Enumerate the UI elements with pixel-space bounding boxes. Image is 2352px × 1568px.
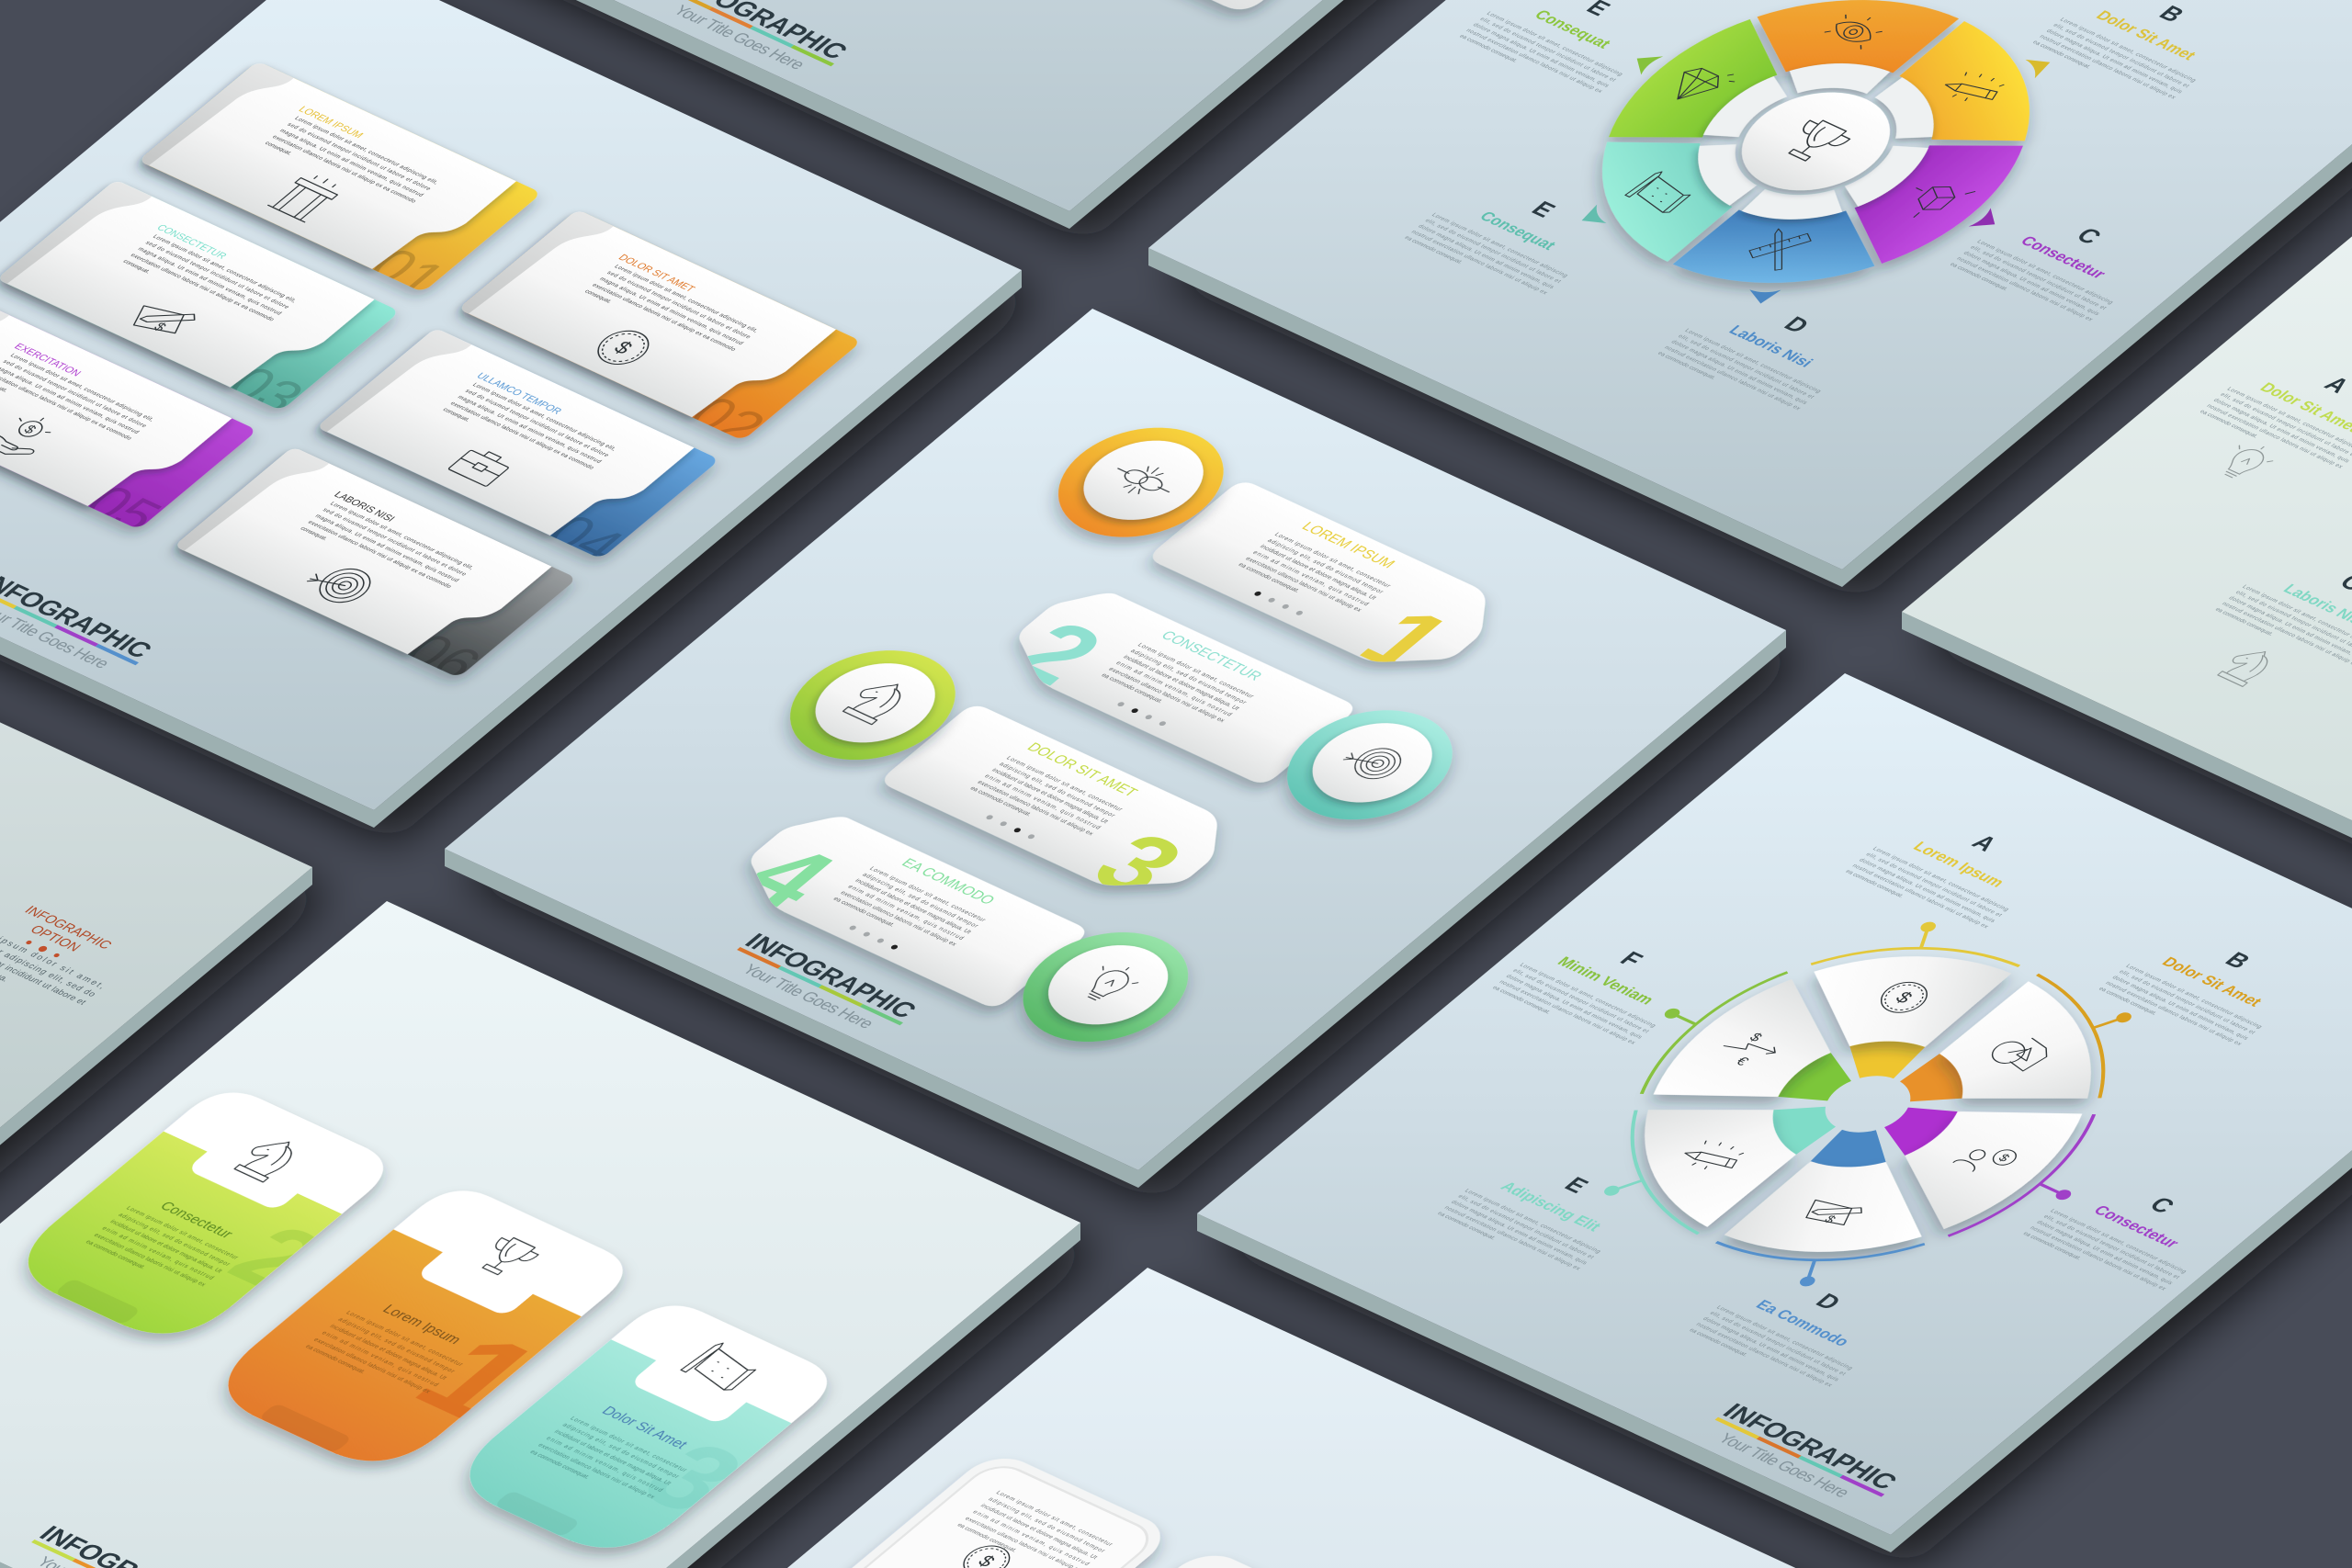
label F: dolore magna aliqua. Ut enim ad minim veniam, quis <box>1504 974 1644 1040</box>
segment icons <box>1621 948 2116 1259</box>
label E upper: Lorem ipsum dolor sit amet, consectetur adipiscing <box>1485 11 1624 77</box>
label B <box>2097 919 2316 1053</box>
step 2 card: ea commodo consequat. <box>1100 672 1164 705</box>
card 06: Lorem ipsum dolor sit amet, consectetur adipiscing elit, <box>328 501 475 571</box>
panel: top centre sheet <box>376 0 1717 229</box>
card 01: Lorem ipsum dolor sit amet, consectetur adipiscing elit, <box>293 116 440 186</box>
label A: A <box>1966 830 2003 856</box>
white segments <box>1538 890 2198 1318</box>
white card: Lorem ipsum dolor sit amet, consectetur <box>994 1490 1114 1548</box>
card 06 <box>159 446 579 691</box>
label B: B <box>2219 948 2256 973</box>
heading: OPTION <box>27 923 84 954</box>
card 01 <box>124 62 543 306</box>
step 4 card: incididunt ut labore et dolore magna aliqua. Ut <box>854 878 972 935</box>
card: Consectetur: adipiscing elit, sed do eiusmod tempor <box>117 1213 232 1268</box>
step 3 badge <box>756 630 989 780</box>
card 02: exercitation ullamco laboris nisi ut aliquip ex ea commodo <box>591 283 738 353</box>
card 06: consequat. <box>299 525 329 542</box>
card 04: consequat. <box>441 407 471 423</box>
card 03: sed do eiusmod tempor incididunt ut labore et dolore <box>143 240 290 310</box>
label C: C <box>2143 1192 2181 1218</box>
step 2 badge <box>1253 690 1487 840</box>
card 02: magna aliqua. Ut enim ad minim veniam, quis nostrud <box>598 276 745 346</box>
label A: dolore magna aliqua. Ut enim ad minim veniam, quis <box>2211 398 2351 464</box>
card 05: EXERCITATION <box>12 342 83 378</box>
label F: nostrud exercitation ullamco laboris nisi ut aliquip ex <box>1498 979 1637 1046</box>
step 2 card: adipiscing elit, sed do eiusmod tempor <box>1128 649 1249 705</box>
label E lower: E <box>1526 197 1562 221</box>
label D: nostrud exercitation ullamco laboris nisi ut aliquip ex <box>1694 1322 1834 1389</box>
label F: elit, sed do eiusmod tempor incididunt ut labore et <box>1511 968 1650 1034</box>
step 3 card: incididunt ut labore et dolore magna aliqua. Ut <box>990 768 1109 825</box>
logo: INFOGRAPHIC <box>739 929 922 1022</box>
step 2 card: CONSECTETUR <box>1158 628 1265 683</box>
label C: nostrud exercitation ullamco laboris nisi ut aliquip ex <box>2029 1225 2168 1292</box>
card 05: Lorem ipsum dolor sit amet, consectetur adipiscing elit, <box>8 353 155 423</box>
label C: Consectetur <box>2017 233 2109 282</box>
card 02: DOLOR SIT AMET <box>616 253 697 294</box>
card 03 <box>0 179 401 423</box>
white card: adipiscing elit, sed do eiusmod tempor <box>987 1496 1107 1554</box>
label B: dolore magna aliqua. Ut enim ad minim veniam, quis <box>2110 975 2250 1041</box>
card: Dolor Sit Amet: adipiscing elit, sed do eiusmod tempor <box>560 1423 681 1480</box>
segment icons <box>1552 0 2072 311</box>
label E <box>1436 1145 1655 1278</box>
heading: INFOGRAPHIC <box>21 904 115 952</box>
step 4 card: 4 <box>719 829 858 926</box>
step 1 card: 1 <box>1337 592 1476 690</box>
panel: three rounded cards <box>0 901 1080 1568</box>
card 04: Lorem ipsum dolor sit amet, consectetur adipiscing elit, <box>471 382 617 452</box>
card: Consectetur: ea commodo consequat. <box>84 1239 147 1270</box>
step 2 card: Lorem ipsum dolor sit amet, consectetur <box>1136 642 1255 700</box>
card 01: consequat. <box>263 141 294 156</box>
card: Consectetur: incididunt ut labore et dolore magna aliqua. Ut <box>108 1219 223 1274</box>
label E lower: dolore magna aliqua. Ut enim ad minim veniam, quis <box>1417 223 1555 290</box>
card: Consectetur: Lorem ipsum dolor sit amet, consectetur <box>124 1206 240 1261</box>
label B: elit, sed do eiusmod tempor incididunt ut labore et <box>2118 969 2256 1035</box>
card 02 <box>444 209 863 454</box>
label A: elit, sed do eiusmod tempor incididunt ut labore et <box>1864 852 2004 919</box>
step 3 card <box>875 705 1224 898</box>
logo <box>650 0 856 81</box>
card: Lorem Ipsum: Lorem Ipsum <box>379 1303 464 1347</box>
wheel <box>1476 0 2156 359</box>
step 4 card: EA COMMODO <box>898 856 998 908</box>
card: Dolor Sit Amet: 3 <box>616 1423 772 1532</box>
step 1 card: LOREM IPSUM <box>1298 520 1398 571</box>
label C: elit, sed do eiusmod tempor incididunt ut labore et <box>1969 244 2108 311</box>
label B: Dolor Sit Amet <box>2158 954 2266 1010</box>
label A <box>1844 803 2063 935</box>
label E: nostrud exercitation ullamco laboris nisi ut aliquip ex <box>1442 1205 1582 1271</box>
icon: bulb <box>2212 439 2280 484</box>
step 4 badge <box>989 912 1222 1062</box>
step 3 card: adipiscing elit, sed do eiusmod tempor <box>998 761 1117 818</box>
label D: ea commodo consequat. <box>1688 1327 1749 1358</box>
card 06: magna aliqua. Ut enim ad minim veniam, quis nostrud <box>313 513 460 583</box>
label B: elit, sed do eiusmod tempor incididunt ut labore et <box>2052 23 2190 89</box>
step 4 card: Lorem ipsum dolor sit amet, consectetur <box>868 866 988 923</box>
white card <box>775 1449 1177 1568</box>
label D: ea commodo consequat. <box>1656 351 1717 381</box>
panel: colour wheel <box>1148 0 2352 587</box>
label C: Consectetur <box>2090 1202 2183 1251</box>
step 1 card: ea commodo consequat. <box>1237 562 1301 594</box>
card 01: sed do eiusmod tempor incididunt ut labore et dolore <box>286 122 433 192</box>
label E: dolore magna aliqua. Ut enim ad minim veniam, quis <box>1450 1200 1589 1266</box>
step 2 card <box>1009 593 1358 795</box>
label E upper <box>1458 0 1677 100</box>
label B: ea commodo consequat. <box>2031 39 2093 70</box>
label E lower: ea commodo consequat. <box>1403 235 1464 265</box>
card 05: 05 <box>71 475 176 543</box>
label D: dolore magna aliqua. Ut enim ad minim veniam, quis <box>1669 339 1809 406</box>
label C: ea commodo consequat. <box>2021 1231 2083 1261</box>
white card: incididunt ut labore et dolore magna aliqua. Ut <box>978 1503 1099 1561</box>
label B: ea commodo consequat. <box>2097 987 2158 1017</box>
white card fragment <box>1075 0 1419 16</box>
label D: Laboris Nisi <box>1725 322 1816 370</box>
card 01: LOREM IPSUM <box>296 105 366 141</box>
card 06: 06 <box>390 623 496 691</box>
label B <box>2031 0 2250 107</box>
arrow markers <box>1487 0 2145 350</box>
label C: Lorem ipsum dolor sit amet, consectetur adipiscing <box>2049 1208 2188 1275</box>
card: Dolor Sit Amet: incididunt ut labore et dolore magna aliqua. Ut <box>552 1429 672 1486</box>
label F: Lorem ipsum dolor sit amet, consectetur adipiscing <box>1518 963 1657 1029</box>
label E: Lorem ipsum dolor sit amet, consectetur adipiscing <box>1463 1188 1602 1255</box>
step 2 card: 2 <box>988 604 1126 702</box>
outer colour segments <box>1498 0 2133 348</box>
label E upper: elit, sed do eiusmod tempor incididunt ut labore et <box>1478 17 1617 83</box>
label D: D <box>1778 312 1815 337</box>
second white card <box>984 1546 1386 1568</box>
step 2 card: enim ad minim veniam, quis nostrud <box>1114 660 1233 717</box>
card 01: magna aliqua. Ut enim ad minim veniam, quis nostrud <box>278 128 425 198</box>
card: Dolor Sit Amet: exercitation ullamco laboris nisi ut aliquip ex <box>537 1443 656 1500</box>
logo <box>1697 1399 1906 1512</box>
step 3 card: enim ad minim veniam, quis nostrud <box>983 773 1102 830</box>
label C: Lorem ipsum dolor sit amet, consectetur adipiscing <box>1975 239 2115 306</box>
step 1 card: exercitation ullamco laboris nisi ut aliquip ex <box>1244 556 1363 614</box>
card 06: exercitation ullamco laboris nisi ut aliquip ex ea commodo <box>306 520 453 590</box>
label B: Lorem ipsum dolor sit amet, consectetur adipiscing <box>2124 964 2264 1030</box>
label E: ea commodo consequat. <box>1436 1211 1498 1241</box>
label A: ea commodo consequat. <box>1844 869 1905 899</box>
step 3 card: 3 <box>1069 816 1207 914</box>
card: Consectetur: 2 <box>205 1208 349 1310</box>
step 2 card: incididunt ut labore et dolore magna aliqua. Ut <box>1122 655 1240 712</box>
label C <box>2213 542 2352 673</box>
inner colour segments <box>1722 1010 2014 1199</box>
label B: dolore magna aliqua. Ut enim ad minim veniam, quis <box>2044 28 2184 95</box>
card 03: magna aliqua. Ut enim ad minim veniam, quis nostrud <box>136 246 283 316</box>
label A <box>2199 344 2352 476</box>
label E: Adipiscing Elit <box>1497 1179 1605 1235</box>
pie wheel <box>1470 846 2266 1362</box>
card 06: LABORIS NISI <box>332 491 397 524</box>
label D: dolore magna aliqua. Ut enim ad minim veniam, quis <box>1702 1316 1840 1382</box>
label A: Lorem ipsum dolor sit amet, consectetur adipiscing <box>1871 846 2010 912</box>
step 4 card: adipiscing elit, sed do eiusmod tempor <box>861 872 980 930</box>
card 04 <box>301 328 721 572</box>
step 4 card: ea commodo consequat. <box>831 897 896 928</box>
card 04: sed do eiusmod tempor incididunt ut labore et dolore <box>463 389 610 458</box>
label F: ea commodo consequat. <box>1491 985 1552 1015</box>
card: Lorem Ipsum: exercitation ullamco laboris nisi ut aliquip ex <box>312 1337 432 1394</box>
label E lower: nostrud exercitation ullamco laboris nisi ut aliquip ex <box>1409 230 1549 296</box>
card: Lorem Ipsum: incididunt ut labore et dolore magna aliqua. Ut <box>328 1324 448 1381</box>
card: Consectetur: enim ad minim veniam, quis nostrud <box>100 1226 215 1281</box>
label A: ea commodo consequat. <box>2199 409 2259 439</box>
card: Dolor Sit Amet <box>441 1294 852 1567</box>
label A: dolore magna aliqua. Ut enim ad minim veniam, quis <box>1858 857 1996 924</box>
label C: nostrud exercitation ullamco laboris nisi ut aliquip ex <box>1955 256 2095 322</box>
label B: B <box>2154 1 2190 27</box>
logo: Your Title Goes Here <box>670 2 810 73</box>
panel: pie sheet with labels A to F <box>1197 673 2352 1552</box>
card 05 <box>0 299 259 543</box>
label D: Lorem ipsum dolor sit amet, consectetur adipiscing <box>1714 1304 1854 1371</box>
card: Lorem Ipsum: 1 <box>385 1311 573 1444</box>
card 02: consequat. <box>583 288 614 305</box>
white card: ea commodo consequat. <box>956 1522 1018 1553</box>
panel: bottom partial sheet <box>500 1268 1841 1568</box>
card: Lorem Ipsum: Lorem ipsum dolor sit amet, consectetur <box>345 1310 465 1368</box>
card 02: 02 <box>675 386 780 454</box>
label E lower: Consequat <box>1476 209 1560 253</box>
panel: right partial sheet <box>1902 72 2352 951</box>
step 4 card: enim ad minim veniam, quis nostrud <box>846 885 965 942</box>
card: Lorem Ipsum: adipiscing elit, sed do eiusmod tempor <box>336 1317 457 1374</box>
label E upper: nostrud exercitation ullamco laboris nisi ut aliquip ex <box>1464 28 1604 95</box>
card: Consectetur: exercitation ullamco laboris nisi ut aliquip ex <box>92 1233 208 1288</box>
step 1 badge <box>1024 408 1258 558</box>
card 02: sed do eiusmod tempor incididunt ut labore et dolore <box>605 270 752 340</box>
label A: nostrud exercitation ullamco laboris nisi ut aliquip ex <box>2205 403 2345 470</box>
label E: elit, sed do eiusmod tempor incididunt ut labore et <box>1456 1194 1596 1260</box>
label F <box>1491 919 1710 1052</box>
step 1 card: incididunt ut labore et dolore magna aliqua. Ut <box>1259 544 1377 601</box>
white ring segments <box>1643 28 1989 254</box>
label B: nostrud exercitation ullamco laboris nisi ut aliquip ex <box>2038 34 2177 100</box>
step 2 card: exercitation ullamco laboris nisi ut aliquip ex <box>1107 667 1227 724</box>
card 01: exercitation ullamco laboris nisi ut aliquip ex ea commodo <box>271 134 418 204</box>
icon: chess knight <box>2215 645 2278 687</box>
label D: Ea Commodo <box>1752 1297 1853 1349</box>
outer arcs and pins <box>1470 846 2266 1362</box>
label C <box>1948 196 2167 328</box>
card 04: ULLAMCO TEMPOR <box>474 371 564 416</box>
step 1 card: enim ad minim veniam, quis nostrud <box>1251 550 1370 607</box>
step 3 card: Lorem ipsum dolor sit amet, consectetur <box>1004 755 1125 813</box>
label E lower: elit, sed do eiusmod tempor incididunt ut labore et <box>1423 218 1563 285</box>
step 1 card: adipiscing elit, sed do eiusmod tempor <box>1265 538 1385 595</box>
label B: Dolor Sit Amet <box>2092 8 2199 63</box>
card: Dolor Sit Amet: ea commodo consequat. <box>528 1450 591 1481</box>
card 03: Lorem ipsum dolor sit amet, consectetur adipiscing elit, <box>151 234 298 304</box>
card 04: magna aliqua. Ut enim ad minim veniam, quis nostrud <box>456 395 603 465</box>
label E lower: Lorem ipsum dolor sit amet, consectetur adipiscing <box>1430 212 1569 278</box>
step 1 card: Lorem ipsum dolor sit amet, consectetur <box>1272 532 1392 589</box>
label C: dolore magna aliqua. Ut enim ad minim veniam, quis <box>2035 1220 2174 1286</box>
card 06: sed do eiusmod tempor incididunt ut labore et dolore <box>321 507 468 577</box>
label F: Minim Veniam <box>1554 954 1657 1008</box>
card 02: Lorem ipsum dolor sit amet, consectetur adipiscing elit, <box>613 264 760 333</box>
label D: D <box>1810 1289 1847 1314</box>
label D: elit, sed do eiusmod tempor incididunt ut labore et <box>1708 1311 1848 1377</box>
label E: E <box>1558 1172 1595 1198</box>
panel: six note cards <box>0 0 1022 828</box>
label C: ea commodo consequat. <box>1948 262 2009 292</box>
step 4 card <box>741 817 1090 1019</box>
label A: nostrud exercitation ullamco laboris nisi ut aliquip ex <box>1850 863 1990 930</box>
label D: nostrud exercitation ullamco laboris nisi ut aliquip ex <box>1663 344 1803 412</box>
label D: Lorem ipsum dolor sit amet, consectetur adipiscing <box>1683 328 1823 394</box>
centre disc <box>1712 74 1920 209</box>
label C <box>2021 1165 2241 1298</box>
label E upper: ea commodo consequat. <box>1458 33 1519 64</box>
card 05: sed do eiusmod tempor incididunt ut labore et dolore <box>1 359 148 429</box>
card 01: 01 <box>356 238 460 306</box>
card: Dolor Sit Amet: Lorem ipsum dolor sit amet, consectetur <box>569 1416 689 1473</box>
label C: C <box>2071 223 2108 249</box>
card 04: 04 <box>533 504 639 572</box>
card: Consectetur: Consectetur <box>156 1200 236 1241</box>
step 1 card <box>1143 483 1492 676</box>
panel: left partial sheet <box>0 546 312 1425</box>
card: Dolor Sit Amet: Dolor Sit Amet <box>598 1404 691 1452</box>
card 04: exercitation ullamco laboris nisi ut aliquip ex ea commodo <box>448 400 595 471</box>
card 03: CONSECTETUR <box>154 223 229 261</box>
step 3 card: exercitation ullamco laboris nisi ut aliquip ex <box>976 780 1095 837</box>
card: Lorem Ipsum <box>199 1179 655 1484</box>
label D: elit, sed do eiusmod tempor incididunt ut labore et <box>1677 333 1815 400</box>
dots <box>24 939 62 959</box>
card 03: 03 <box>213 356 319 423</box>
card 03: exercitation ullamco laboris nisi ut aliquip ex ea commodo <box>129 253 276 322</box>
label E upper: dolore magna aliqua. Ut enim ad minim veniam, quis <box>1471 22 1611 88</box>
logo: Your Title Goes Here <box>739 961 879 1032</box>
panel: centre four step sheet <box>445 309 1786 1188</box>
step 4 card: exercitation ullamco laboris nisi ut aliquip ex <box>839 890 958 947</box>
label B: Lorem ipsum dolor sit amet, consectetur adipiscing <box>2058 17 2198 84</box>
card: Lorem Ipsum: ea commodo consequat. <box>304 1344 367 1375</box>
label C: dolore magna aliqua. Ut enim ad minim veniam, quis <box>1962 251 2101 317</box>
label E upper: Consequat <box>1531 7 1615 51</box>
step 3 card: ea commodo consequat. <box>968 785 1033 818</box>
label C: elit, sed do eiusmod tempor incididunt ut labore et <box>2041 1213 2181 1280</box>
card: Lorem Ipsum: enim ad minim veniam, quis nostrud <box>320 1330 440 1388</box>
label E lower <box>1403 169 1622 301</box>
label F: F <box>1614 947 1649 971</box>
label B: nostrud exercitation ullamco laboris nisi ut aliquip ex <box>2104 980 2244 1047</box>
label D <box>1656 285 1875 417</box>
card: Dolor Sit Amet: enim ad minim veniam, quis nostrud <box>544 1436 664 1494</box>
white card: enim ad minim veniam, quis nostrud <box>971 1509 1091 1567</box>
icon: trophy <box>1777 117 1855 166</box>
logo: INFOGRAPHIC <box>1717 1399 1904 1494</box>
step 3 card: DOLOR SIT AMET <box>1023 740 1141 800</box>
label C: ea commodo consequat. <box>2213 607 2275 637</box>
card: Consectetur <box>17 1093 390 1347</box>
card 03: consequat. <box>121 259 152 275</box>
logo: Your Title Goes Here <box>1714 1429 1855 1501</box>
label A: Lorem Ipsum <box>1909 839 2008 890</box>
label D <box>1688 1261 1906 1394</box>
